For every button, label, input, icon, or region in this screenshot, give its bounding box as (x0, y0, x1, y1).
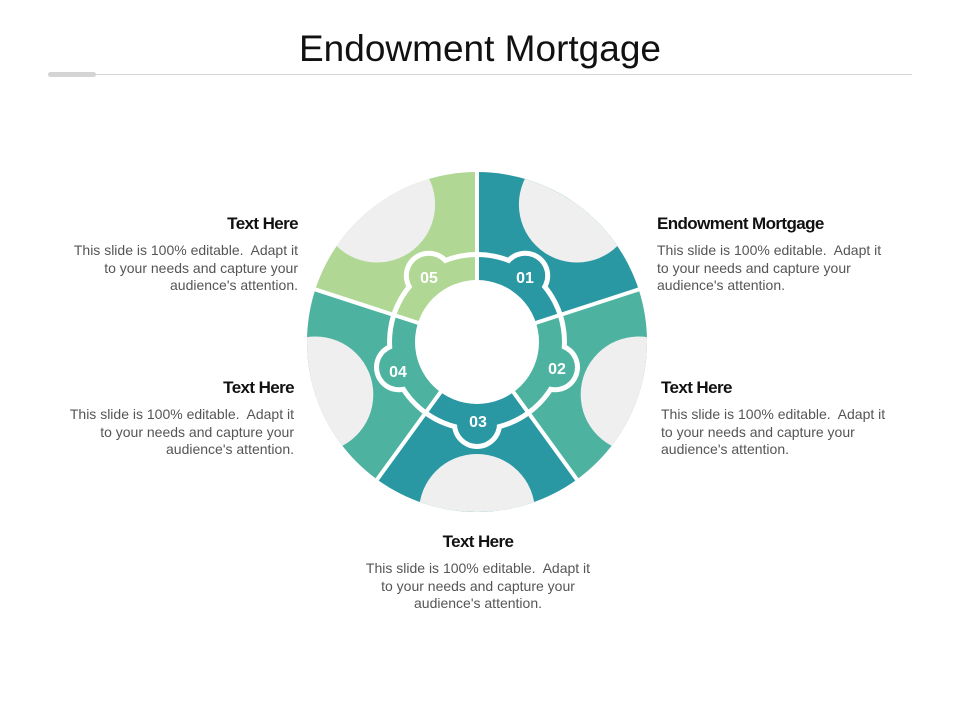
text block: 02: to your needs and capture your (661, 424, 855, 440)
text block: 04: Text Here (223, 378, 294, 397)
diagram: segmented wheel (307, 172, 647, 512)
text block: 05 (74, 214, 298, 293)
text block: 04: This slide is 100% editable. Adapt it (70, 406, 294, 422)
text block: 05: to your needs and capture your (104, 260, 298, 276)
text block: 02: Text Here (661, 378, 732, 397)
text block: Endowment Mortgage (01): audience's attention. (657, 277, 785, 293)
segment 01 (477, 172, 639, 342)
text block: Endowment Mortgage (01): This slide is 100% editable. Adapt it (657, 242, 881, 258)
text block: 03: to your needs and capture your (381, 578, 575, 594)
text block: 05: This slide is 100% editable. Adapt it (74, 242, 298, 258)
segment 03 (377, 342, 577, 512)
text block: 05: audience's attention. (170, 277, 298, 293)
text block: 04 (70, 378, 294, 457)
title: Endowment Mortgage (299, 28, 661, 69)
step numbers (389, 270, 566, 431)
text block: Endowment Mortgage (01): to your needs and capture your (657, 260, 851, 276)
segment 02 (477, 290, 647, 480)
text block: 02: audience's attention. (661, 441, 789, 457)
text block: 02 (661, 378, 886, 457)
text block: 03 (366, 532, 590, 611)
segment 05 (315, 172, 477, 342)
segment 04 (307, 290, 477, 480)
step numbers: 02 (548, 361, 566, 378)
text block: Endowment Mortgage (01): Endowment Mortgage (657, 214, 824, 233)
text block: 04: audience's attention. (166, 441, 294, 457)
text block: 04: to your needs and capture your (100, 424, 294, 440)
text block: 03: This slide is 100% editable. Adapt it (366, 560, 590, 576)
text block: 02: This slide is 100% editable. Adapt it (661, 406, 885, 422)
step numbers: 03 (469, 414, 487, 431)
step numbers: 04 (389, 364, 407, 381)
step numbers: 01 (516, 270, 534, 287)
step numbers: 05 (420, 270, 438, 287)
text block: Endowment Mortgage (01) (657, 214, 882, 293)
text block: 03: Text Here (443, 532, 513, 551)
text block: 05: Text Here (227, 214, 298, 233)
title underline (48, 74, 912, 75)
text block: 03: audience's attention. (414, 595, 542, 611)
